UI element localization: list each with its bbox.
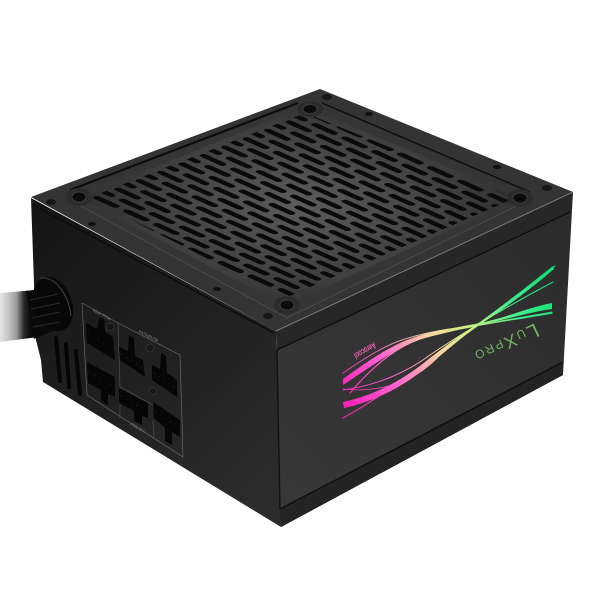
thick lower streak (343, 266, 554, 408)
connector: VGA / PCIe upper (86, 317, 115, 360)
cable bundle (0, 287, 66, 342)
lit grille plate (80, 106, 520, 306)
dark frame groove (70, 103, 298, 190)
connector labels: VGA / PCIe (92, 307, 113, 322)
connector: PCIe lower (87, 362, 115, 405)
LuxPro logo: LUXPRO (470, 318, 542, 368)
cable grommet (26, 271, 80, 337)
top face of the case (31, 89, 573, 333)
connector: SATA left (119, 335, 145, 377)
recessed grille frame (66, 100, 533, 318)
Aerocool brand mark: Aerocool (352, 340, 378, 361)
connector: SATA right (152, 353, 177, 397)
ventilation slits on the left face (56, 338, 80, 394)
connector pin rows (88, 333, 178, 428)
connector: centre lower (119, 388, 148, 425)
modular connector panel: PCIe E.C. (130, 421, 148, 434)
connector screws (106, 323, 114, 331)
thick upper streak (343, 303, 552, 385)
RGB light streaks (343, 266, 554, 408)
right face of the case (276, 192, 573, 527)
left face of the case (31, 198, 281, 527)
panel outline (82, 303, 183, 457)
modular connector panel (82, 303, 183, 457)
corner screws (46, 94, 552, 319)
ventilation grille (88, 113, 515, 298)
connector: right lower (153, 402, 180, 445)
modular connector panel: SATA/ENTR (138, 328, 159, 343)
